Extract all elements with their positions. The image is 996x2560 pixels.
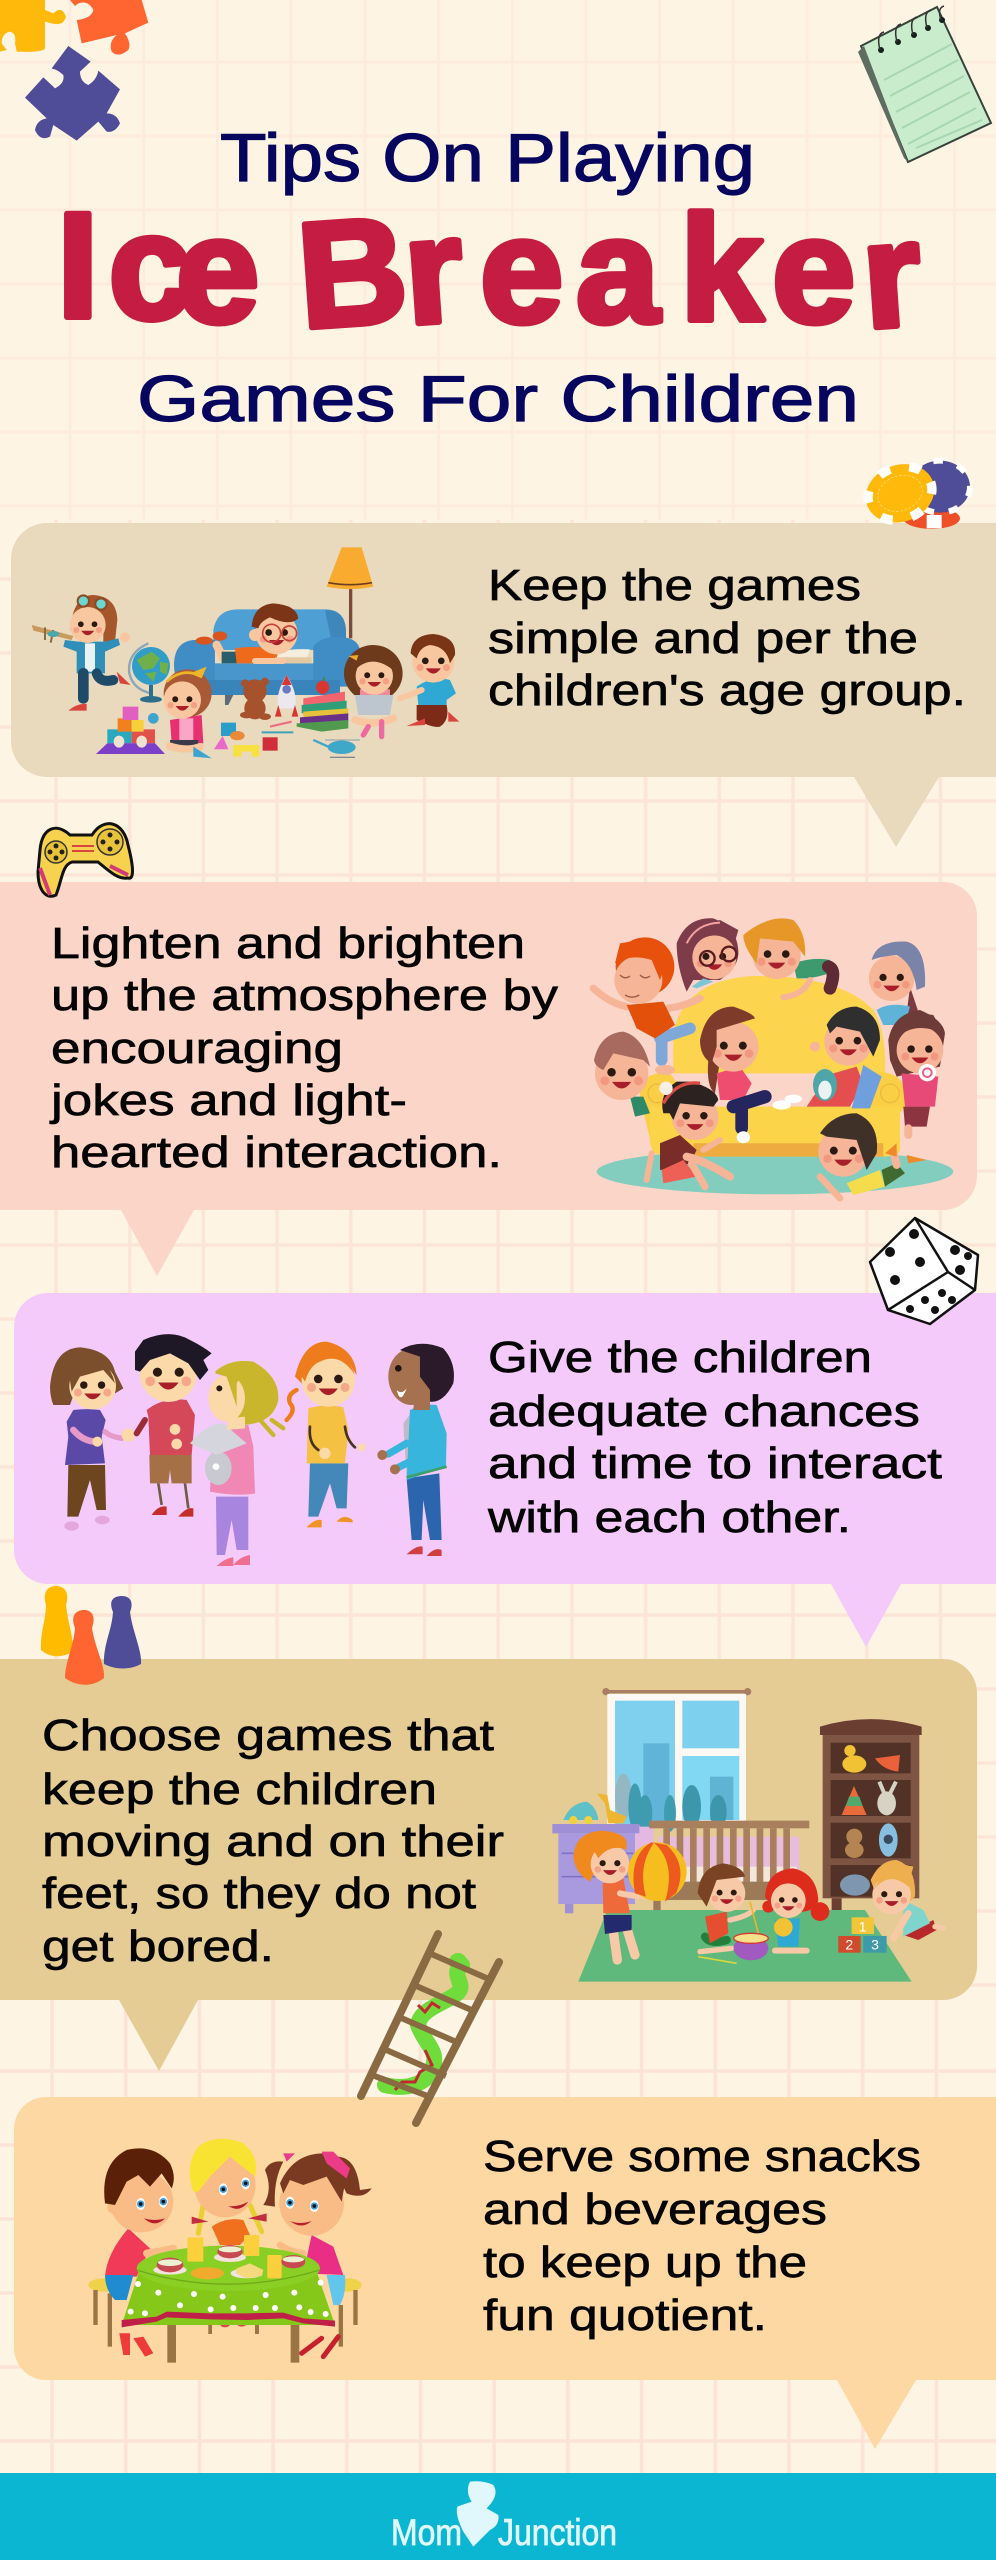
text: keep the games: children's age group. [488,666,966,715]
text: give the children: and time to interact [488,1439,942,1488]
boy with ball [573,1831,657,1960]
boy reading on sofa [196,603,312,663]
window [602,1688,751,1832]
title: tips on playing: Tips On Playing [220,120,755,196]
beach ball [628,1842,687,1902]
title: ice breaker: Ice Breaker [57,181,926,360]
text: choose games: get bored. [42,1922,274,1971]
text: give the children: adequate chances [488,1387,920,1436]
text: lighten and brighten: Lighten and brighten [51,919,525,968]
pilot girl [63,595,131,711]
illustration: children around yellow couch [593,918,953,1198]
green rug [578,1910,912,1982]
icon: board game pawns [41,1586,141,1685]
text: serve some snacks [483,2132,921,2340]
kid: grey beanie [869,942,925,1025]
illustration: children eating at table [88,2139,372,2363]
panel: keep games simple [11,523,996,847]
boy kneeling [400,634,459,727]
text: keep the games [488,561,966,715]
icon: ladder with snake [361,1934,499,2123]
number blocks [838,1917,887,1953]
kid: boy lying [818,1113,927,1198]
girl with bows at table [263,2152,372,2305]
text: give the children: with each other. [487,1493,851,1542]
helicopter toy [313,740,360,757]
bookshelf with toys [820,1719,922,1915]
panel: snacks and beverages [14,2097,996,2449]
footer band [0,2473,996,2560]
blonde girl with bunny [190,1361,283,1566]
panel: lighten the atmosphere [0,882,977,1276]
food and drinks on table [153,2235,305,2279]
illustration: five children talking [50,1334,454,1566]
teddy bear [240,678,271,720]
text: lighten and brighten [49,919,558,1177]
number blocks: 1 [859,1919,867,1935]
table with green cloth [122,2246,335,2327]
illustration: playroom scene [552,1688,943,1982]
plane toy [32,625,73,643]
kid: girl with lollipop [888,1010,945,1135]
yellow couch [640,976,907,1157]
icon: puzzle pieces [0,0,148,141]
boy blue jacket [377,1344,454,1556]
purple dresser with toys [552,1793,653,1913]
girl with bow [164,667,212,758]
logo: MomJunction [391,2481,617,2553]
toy rocket [275,675,298,717]
icon: notebook [858,6,991,162]
boy with drum [698,1863,753,1952]
text: lighten and brighten: encouraging [51,1024,343,1073]
rug [597,1149,953,1194]
girl with laptop [344,645,403,737]
floor lamp [327,547,373,638]
blond child crawling [871,1860,943,1940]
kid: orange hair climbing [593,937,700,1075]
text: serve some snacks: and beverages [483,2185,827,2234]
kid: laughing on couch [700,1007,791,1143]
text: choose games: Choose games that [42,1711,494,1760]
kid: black hair on couch [785,1007,882,1108]
kid: blond boy leaning over [743,918,833,997]
panel: chances to interact [14,1293,996,1647]
text: lighten and brighten: up the atmosphere by [51,971,558,1020]
text: give the children: Give the children [488,1333,872,1382]
logo: MomJunction: Mom [391,2512,462,2553]
number blocks: 3 [871,1936,879,1952]
girl with red hair [762,1868,829,1951]
girl purple shirt [50,1347,135,1531]
crib [649,1821,809,1915]
illustration: children playing in living room [32,547,459,758]
text: choose games [42,1711,504,1971]
text: choose games: feet, so they do not [42,1869,476,1918]
kid: girl sitting front [647,1082,730,1187]
boy at table [104,2148,174,2300]
blonde girl at table [190,2139,267,2245]
globe [129,643,170,703]
shoes and table legs [119,2320,338,2363]
text: serve some snacks: Serve some snacks [483,2132,921,2181]
text: keep the games: simple and per the [488,614,918,663]
text: choose games: keep the children [42,1765,437,1814]
text: lighten and brighten: jokes and light- [49,1076,407,1125]
kid: peeking left [594,1032,650,1117]
icon: gamepad [38,824,132,896]
boy red shirt [135,1334,212,1517]
text: lighten and brighten: hearted interaction. [51,1128,502,1177]
icon: dice [870,1218,978,1324]
text: choose games: moving and on their [42,1817,504,1866]
title: games for children: Games For Children [137,362,859,435]
icon: poker chips [857,455,970,532]
text: keep the games: Keep the games [488,561,861,610]
stools [88,2278,362,2347]
text: serve some snacks: to keep up the [483,2238,807,2287]
logo: MomJunction: Junction [498,2512,617,2553]
sofa [174,609,360,705]
kid: girl with glasses [677,918,738,992]
panel: keep children moving [0,1659,977,2071]
toy blocks [96,707,293,757]
stack of books [297,677,348,732]
toy drum [698,1902,768,1963]
text: give the children [487,1333,942,1542]
girl orange hair [287,1342,366,1527]
text: serve some snacks: fun quotient. [483,2291,767,2340]
number blocks: 2 [845,1936,853,1952]
